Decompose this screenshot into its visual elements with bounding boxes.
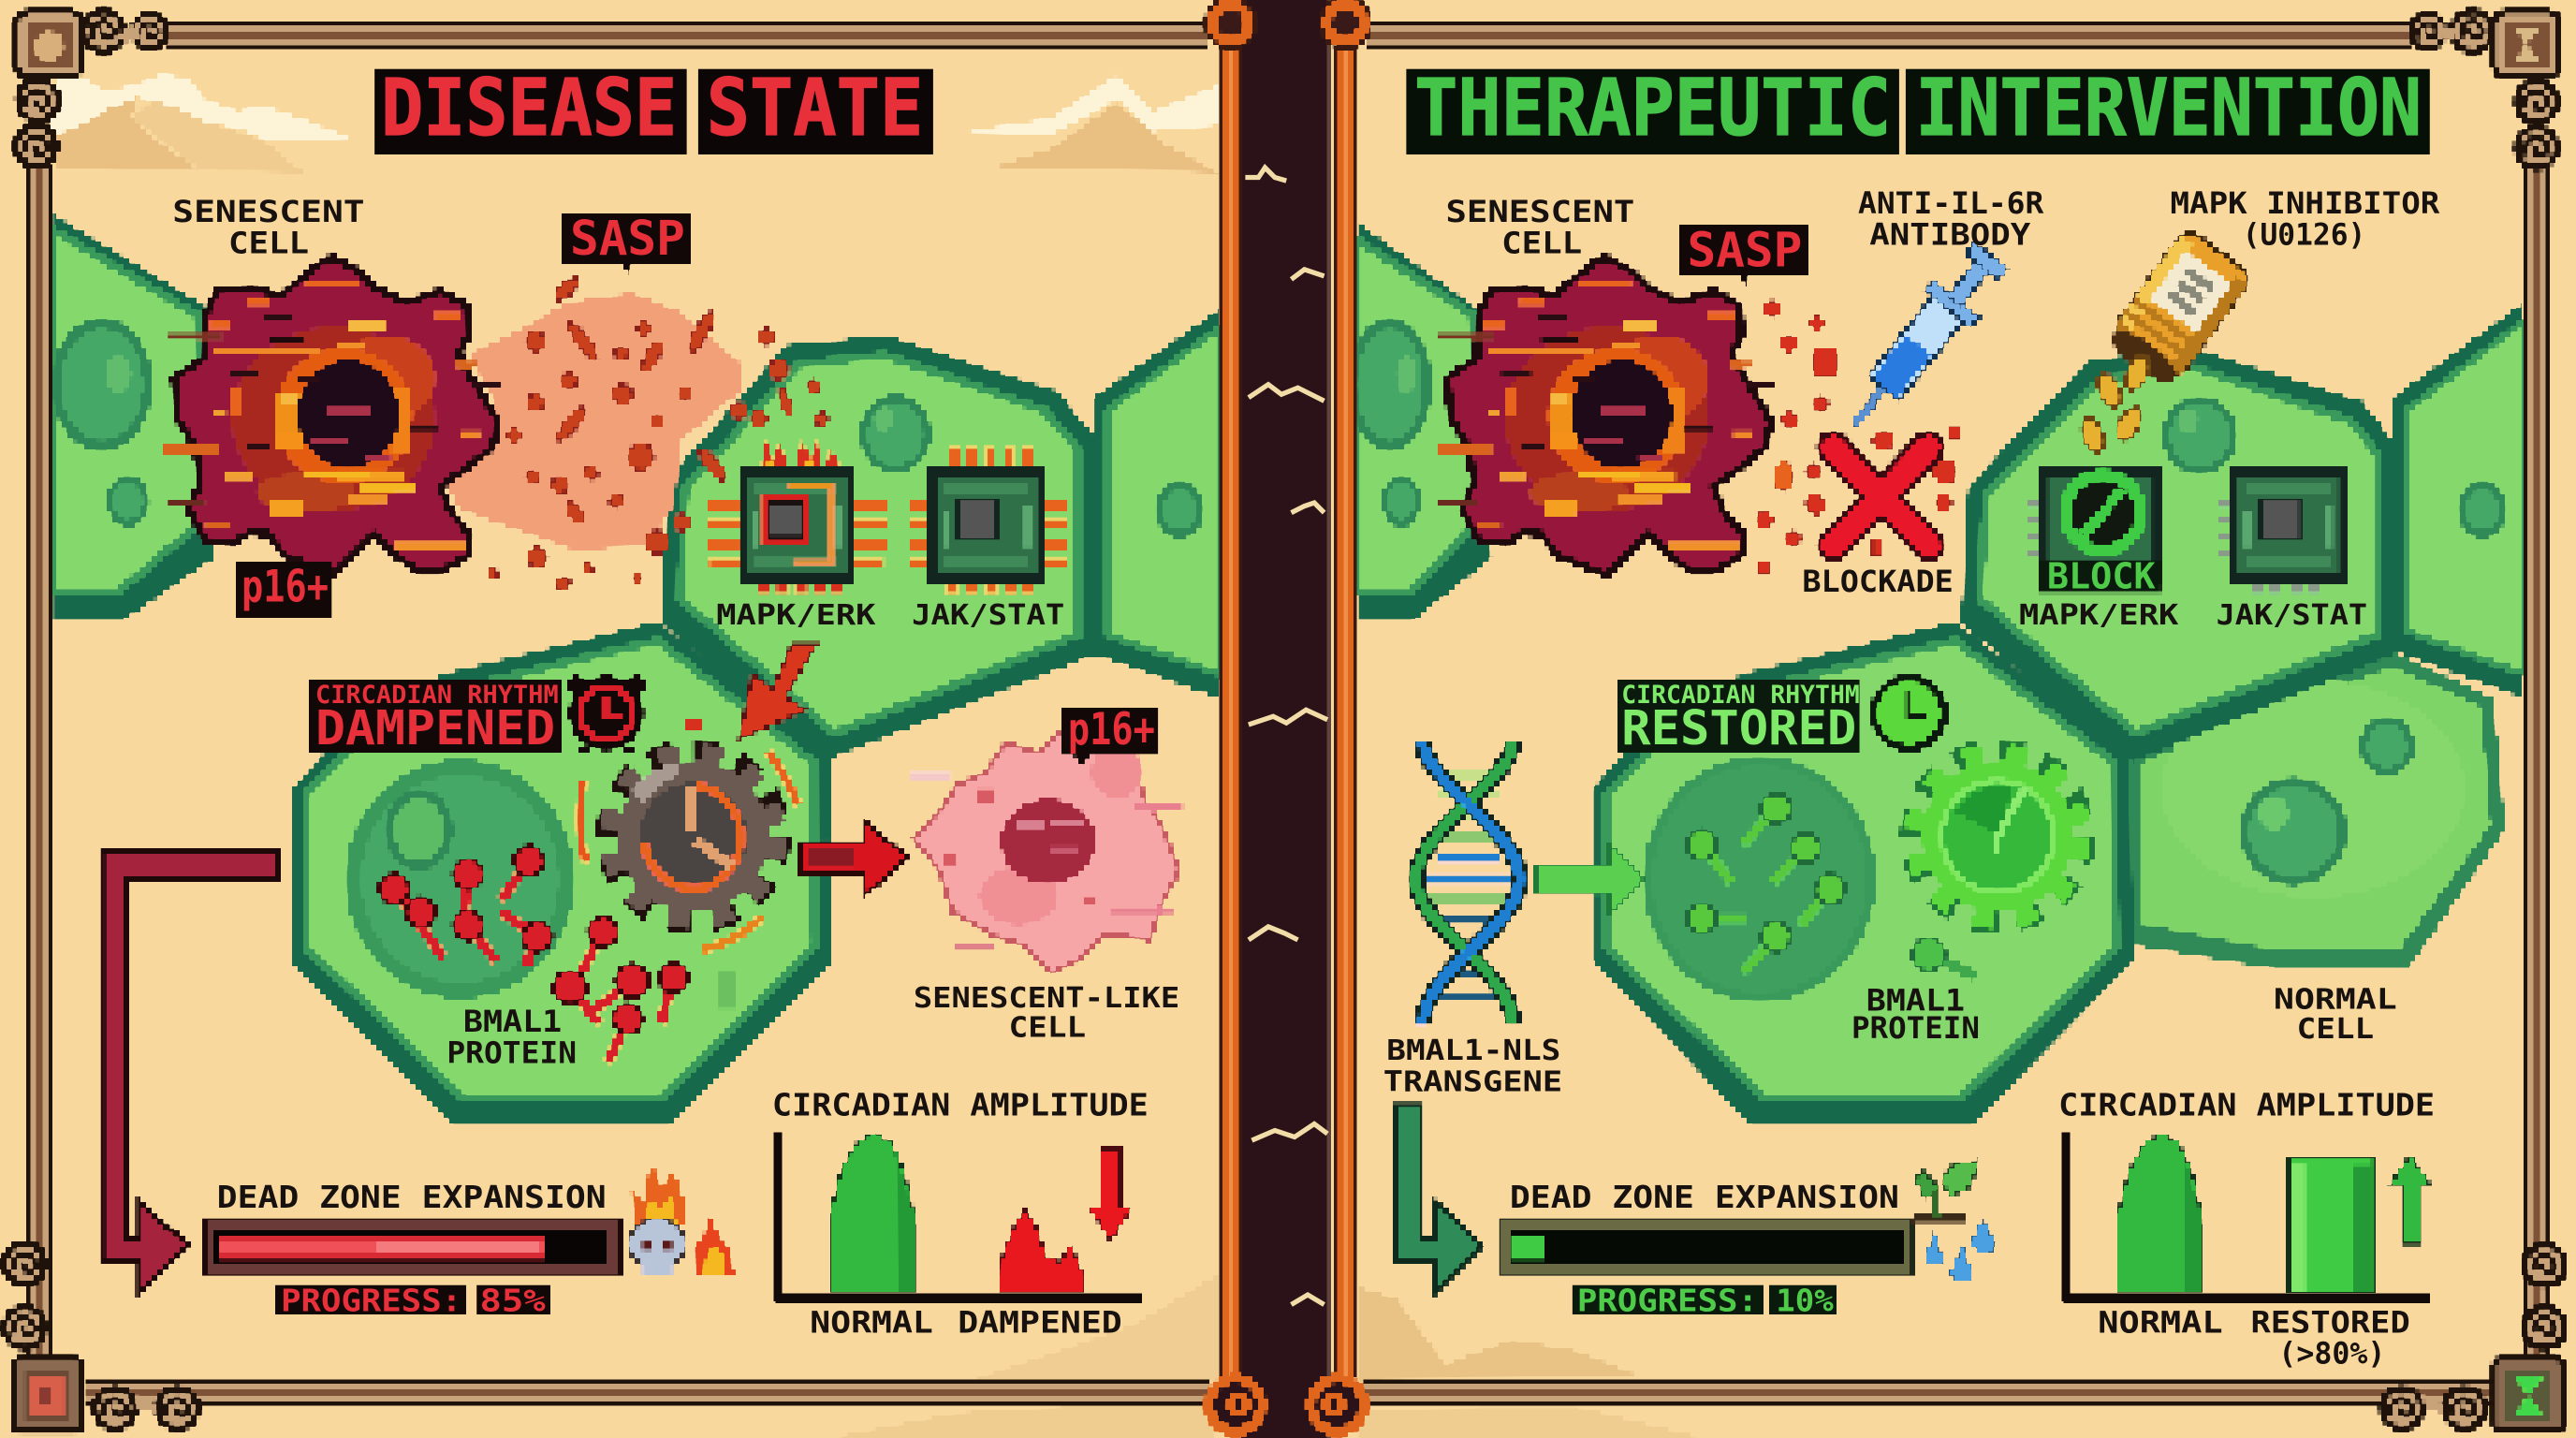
icon: DNA transgene [1416, 741, 1519, 1025]
circadian rhythm restored box [1617, 679, 1862, 751]
pathway arrow: to dead zone [1397, 1106, 1482, 1292]
dead zone progress bar: 85% [205, 1219, 620, 1275]
SASP tag [564, 212, 692, 274]
label: MAPK/ERK right: MAPK/ERK [2019, 599, 2178, 632]
label: anti-IL-6R antibody: ANTI-IL-6R [1858, 185, 2044, 221]
signalling cell treated [1962, 345, 2395, 762]
neighbour cell right [2392, 302, 2524, 698]
label: BMAL1 protein right: BMAL1 [1866, 984, 1965, 1018]
nucleus: restored [1647, 761, 1871, 997]
corner swirls top left [17, 11, 167, 166]
label: circadian amplitude chart right: RESTORED [2250, 1306, 2410, 1340]
label: normal cell: CELL [2297, 1013, 2374, 1046]
corner badge bottom left [13, 1358, 82, 1431]
label: circadian amplitude chart right [2058, 1087, 2435, 1372]
neighbour cell right [1092, 309, 1219, 698]
icon: red X blockade [1834, 447, 1928, 546]
SASP tag [1680, 225, 1808, 286]
label: circadian rhythm restored: RESTORED [1621, 701, 1856, 756]
label: dead zone expansion: DEAD ZONE EXPANSION [217, 1179, 607, 1215]
label: senescent cell: CELL [228, 225, 309, 260]
label: p16+ on senescent-like cell: p16+ [1068, 704, 1155, 756]
label: circadian amplitude chart right: NORMAL [2098, 1306, 2223, 1340]
amplitude chart: therapy [2117, 1134, 2432, 1293]
label: JAK/STAT right: JAK/STAT [2217, 599, 2367, 632]
label: circadian rhythm dampened: CIRCADIAN RHYTHM [315, 682, 559, 710]
nucleus: dampened [345, 759, 575, 999]
title: THERAPEUTIC INTERVENTION: THERAPEUTIC [1414, 62, 1891, 154]
icon: MAPK inhibitor bottle [2077, 227, 2253, 456]
divider squiggles [1245, 168, 1327, 1305]
rail spiral bottom left [1209, 1379, 1262, 1431]
corner swirls top right [2411, 11, 2556, 168]
rail spiral bottom right [1311, 1379, 1364, 1431]
label: BMAL1 protein: PROTEIN [446, 1037, 577, 1071]
title: DISEASE STATE: DISEASE [381, 62, 677, 154]
title: THERAPEUTIC INTERVENTION: INTERVENTION [1915, 62, 2422, 154]
senescent-like cell [912, 725, 1183, 973]
label: JAK/STAT: JAK/STAT [912, 599, 1064, 632]
progress boxes [1571, 1284, 1837, 1314]
lower cell: restored [1592, 621, 2134, 1125]
label: BLOCK: BLOCK [2047, 555, 2156, 597]
chip: JAK/STAT calm [2219, 472, 2343, 594]
corner badge top left [17, 11, 82, 77]
neighbour cell left [51, 213, 213, 621]
pathway arrow: to dead zone [102, 853, 279, 1292]
label: circadian rhythm dampened [315, 682, 559, 756]
label: BMAL1 protein right [1852, 984, 1980, 1046]
label: dead zone expansion right: DEAD ZONE EXPANSION [1510, 1179, 1899, 1215]
label: progress 10% [1577, 1283, 1834, 1319]
title: DISEASE STATE: STATE [707, 62, 923, 154]
label: BMAL1-NLS transgene [1383, 1034, 1562, 1098]
senescent cell [1438, 258, 1776, 575]
label: senescent-like cell: SENESCENT-LIKE [914, 982, 1179, 1015]
label: circadian amplitude chart [772, 1087, 1149, 1340]
senescent cell [165, 258, 503, 575]
progress boxes [276, 1284, 549, 1314]
SASP cloud [446, 274, 828, 590]
label: anti-IL-6R antibody: ANTIBODY [1869, 217, 2031, 253]
label: MAPK inhibitor: (U0126) [2243, 217, 2365, 253]
label: MAPK inhibitor [2170, 185, 2440, 253]
icon: sprout and droplets [1912, 1160, 1996, 1282]
label: progress 10%: 10% [1776, 1283, 1834, 1319]
label: circadian amplitude chart right: (>80%) [2278, 1338, 2385, 1372]
circadian rhythm dampened box [311, 679, 562, 751]
label: circadian amplitude chart: NORMAL [810, 1306, 933, 1340]
gear clock: broken [579, 720, 798, 949]
label: BMAL1 protein right: PROTEIN [1852, 1012, 1980, 1046]
label: BMAL1 protein [446, 1005, 577, 1071]
label: senescent cell [172, 194, 365, 260]
label: senescent cell right: CELL [1501, 225, 1582, 260]
label: p16+: p16+ [242, 561, 329, 612]
chip: JAK/STAT overactive [909, 447, 1068, 594]
label: senescent cell right [1445, 194, 1634, 260]
clock icon [1869, 674, 1949, 753]
label: circadian amplitude chart right: CIRCADIAN AMPLITUDE [2058, 1087, 2435, 1123]
label: senescent-like cell [914, 982, 1179, 1044]
p16 tag [235, 564, 333, 616]
label: BMAL1-NLS transgene: TRANSGENE [1383, 1065, 1562, 1098]
skull and flames icon [629, 1160, 735, 1277]
panel: therapeutic intervention artwork [1347, 222, 2524, 1314]
BLOCK box [2041, 559, 2160, 594]
label: circadian amplitude chart: CIRCADIAN AMPLITUDE [772, 1087, 1149, 1123]
central divider band [1240, 0, 1329, 1438]
label: circadian amplitude chart: DAMPENED [958, 1306, 1122, 1340]
label: circadian rhythm restored: CIRCADIAN RHYTHM [1621, 682, 1860, 710]
title: DISEASE STATE [374, 62, 933, 154]
SASP particles blocked [1756, 301, 1960, 575]
label: progress 85%: PROGRESS: [281, 1283, 461, 1319]
label: senescent cell right: SENESCENT [1445, 194, 1634, 229]
label: progress 85% [281, 1283, 546, 1319]
arrow: stress into cell [739, 644, 816, 740]
title: THERAPEUTIC INTERVENTION [1406, 62, 2430, 154]
label: normal cell [2274, 984, 2397, 1046]
label: progress 85%: 85% [479, 1283, 546, 1319]
label: SASP right: SASP [1687, 223, 1802, 278]
label: BMAL1 protein: BMAL1 [463, 1005, 562, 1039]
dead zone progress bar: 10% [1500, 1219, 1912, 1275]
corner swirls bottom left [5, 1244, 198, 1428]
arrow: transgene into cell [1536, 843, 1645, 916]
chip: MAPK/ERK overactive [707, 437, 887, 594]
signalling cell [662, 335, 1097, 759]
corner swirls bottom right [2382, 1245, 2565, 1428]
label: blockade: BLOCKADE [1802, 565, 1954, 599]
icon: syringe [1832, 237, 2014, 443]
gear clock: restored [1912, 751, 2083, 922]
p16 tag 2 [1060, 708, 1160, 768]
label: BMAL1-NLS transgene: BMAL1-NLS [1386, 1034, 1560, 1067]
label: senescent-like cell: CELL [1009, 1011, 1086, 1044]
label: circadian rhythm dampened: DAMPENED [315, 701, 555, 756]
chip: MAPK/ERK blocked [2027, 472, 2157, 579]
label: normal cell: NORMAL [2274, 984, 2397, 1017]
rail cap top left [1206, 0, 1255, 48]
label: MAPK/ERK: MAPK/ERK [716, 599, 876, 632]
panel: disease state artwork [51, 212, 1219, 1314]
label: MAPK inhibitor: MAPK INHIBITOR [2170, 185, 2440, 221]
neighbour cell left [1347, 222, 1492, 621]
label: senescent cell: SENESCENT [172, 194, 365, 229]
alarm clock icon [567, 675, 646, 755]
BMAL1 proteins green [1687, 794, 1976, 976]
label: anti-IL-6R antibody [1858, 185, 2044, 253]
lower cell: dampened [291, 621, 833, 1125]
amplitude chart: disease [829, 1134, 1132, 1293]
rail cap top right [1321, 0, 1370, 48]
label: progress 10%: PROGRESS: [1577, 1283, 1758, 1319]
corner badge bottom right [2494, 1358, 2563, 1431]
label: SASP: SASP [570, 212, 685, 267]
corner badge top right [2494, 11, 2559, 77]
normal cell [2126, 651, 2506, 970]
arrow: to senescent-like cell [801, 822, 909, 896]
BMAL1 proteins red [379, 846, 688, 1064]
